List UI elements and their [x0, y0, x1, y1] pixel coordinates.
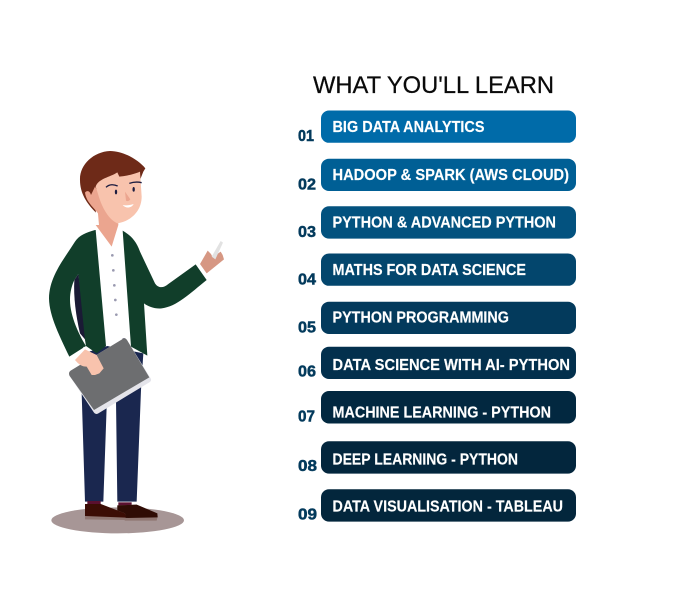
- list item 05: PYTHON PROGRAMMING: [332, 309, 509, 326]
- list item 05: [298, 302, 576, 336]
- list item 04: [298, 254, 576, 288]
- list item 06: DATA SCIENCE WITH AI- PYTHON: [332, 357, 570, 374]
- list item 07: [298, 391, 576, 426]
- title: WHAT YOU'LL LEARN: [313, 72, 554, 99]
- illustration: presenter holding a laptop: [49, 151, 224, 533]
- list item 03: PYTHON & ADVANCED PYTHON: [332, 214, 556, 231]
- list item 09: 09: [298, 506, 317, 523]
- list item 05: 05: [298, 319, 316, 336]
- shirt buttons: [111, 254, 126, 342]
- list item 04: 04: [298, 271, 316, 288]
- list item 09: DATA VISUALISATION - TABLEAU: [332, 499, 563, 516]
- list item 02: HADOOP & SPARK (AWS CLOUD): [332, 167, 569, 184]
- list item 07: MACHINE LEARNING - PYTHON: [332, 404, 551, 421]
- list item 04: MATHS FOR DATA SCIENCE: [332, 262, 526, 279]
- list item 03: 03: [298, 224, 316, 241]
- list item 06: [298, 347, 576, 381]
- list item 08: [298, 441, 576, 475]
- list item 01: [298, 110, 576, 145]
- shirt cuff: [74, 347, 87, 361]
- hair: [80, 151, 145, 213]
- eyes: [115, 190, 117, 194]
- face: [96, 172, 142, 223]
- list item 06: 06: [298, 364, 316, 381]
- list item 03: [298, 206, 576, 241]
- list item 02: [298, 159, 576, 194]
- trousers: [82, 346, 143, 502]
- list item 01: 01: [298, 128, 314, 145]
- chalk: [212, 241, 223, 259]
- list item 08: 08: [298, 458, 317, 475]
- neck: [96, 210, 118, 247]
- floor shadow: [51, 507, 184, 533]
- holding hand: [75, 349, 104, 375]
- jacket lining: [74, 274, 88, 343]
- eyebrows: [106, 182, 142, 187]
- list item 07: 07: [298, 409, 315, 426]
- list item 09: [298, 489, 576, 523]
- list item 02: 02: [298, 176, 316, 194]
- jacket left side and sleeve: [49, 230, 106, 357]
- raised hand: [200, 251, 224, 273]
- laptop: [69, 338, 151, 414]
- list item 01: BIG DATA ANALYTICS: [332, 119, 485, 136]
- shoes: [85, 501, 158, 521]
- smile: [123, 204, 134, 208]
- list item 08: DEEP LEARNING - PYTHON: [332, 452, 518, 469]
- nose: [125, 192, 130, 201]
- ear and jaw shade: [85, 187, 117, 223]
- jacket right side and raised sleeve: [123, 231, 207, 356]
